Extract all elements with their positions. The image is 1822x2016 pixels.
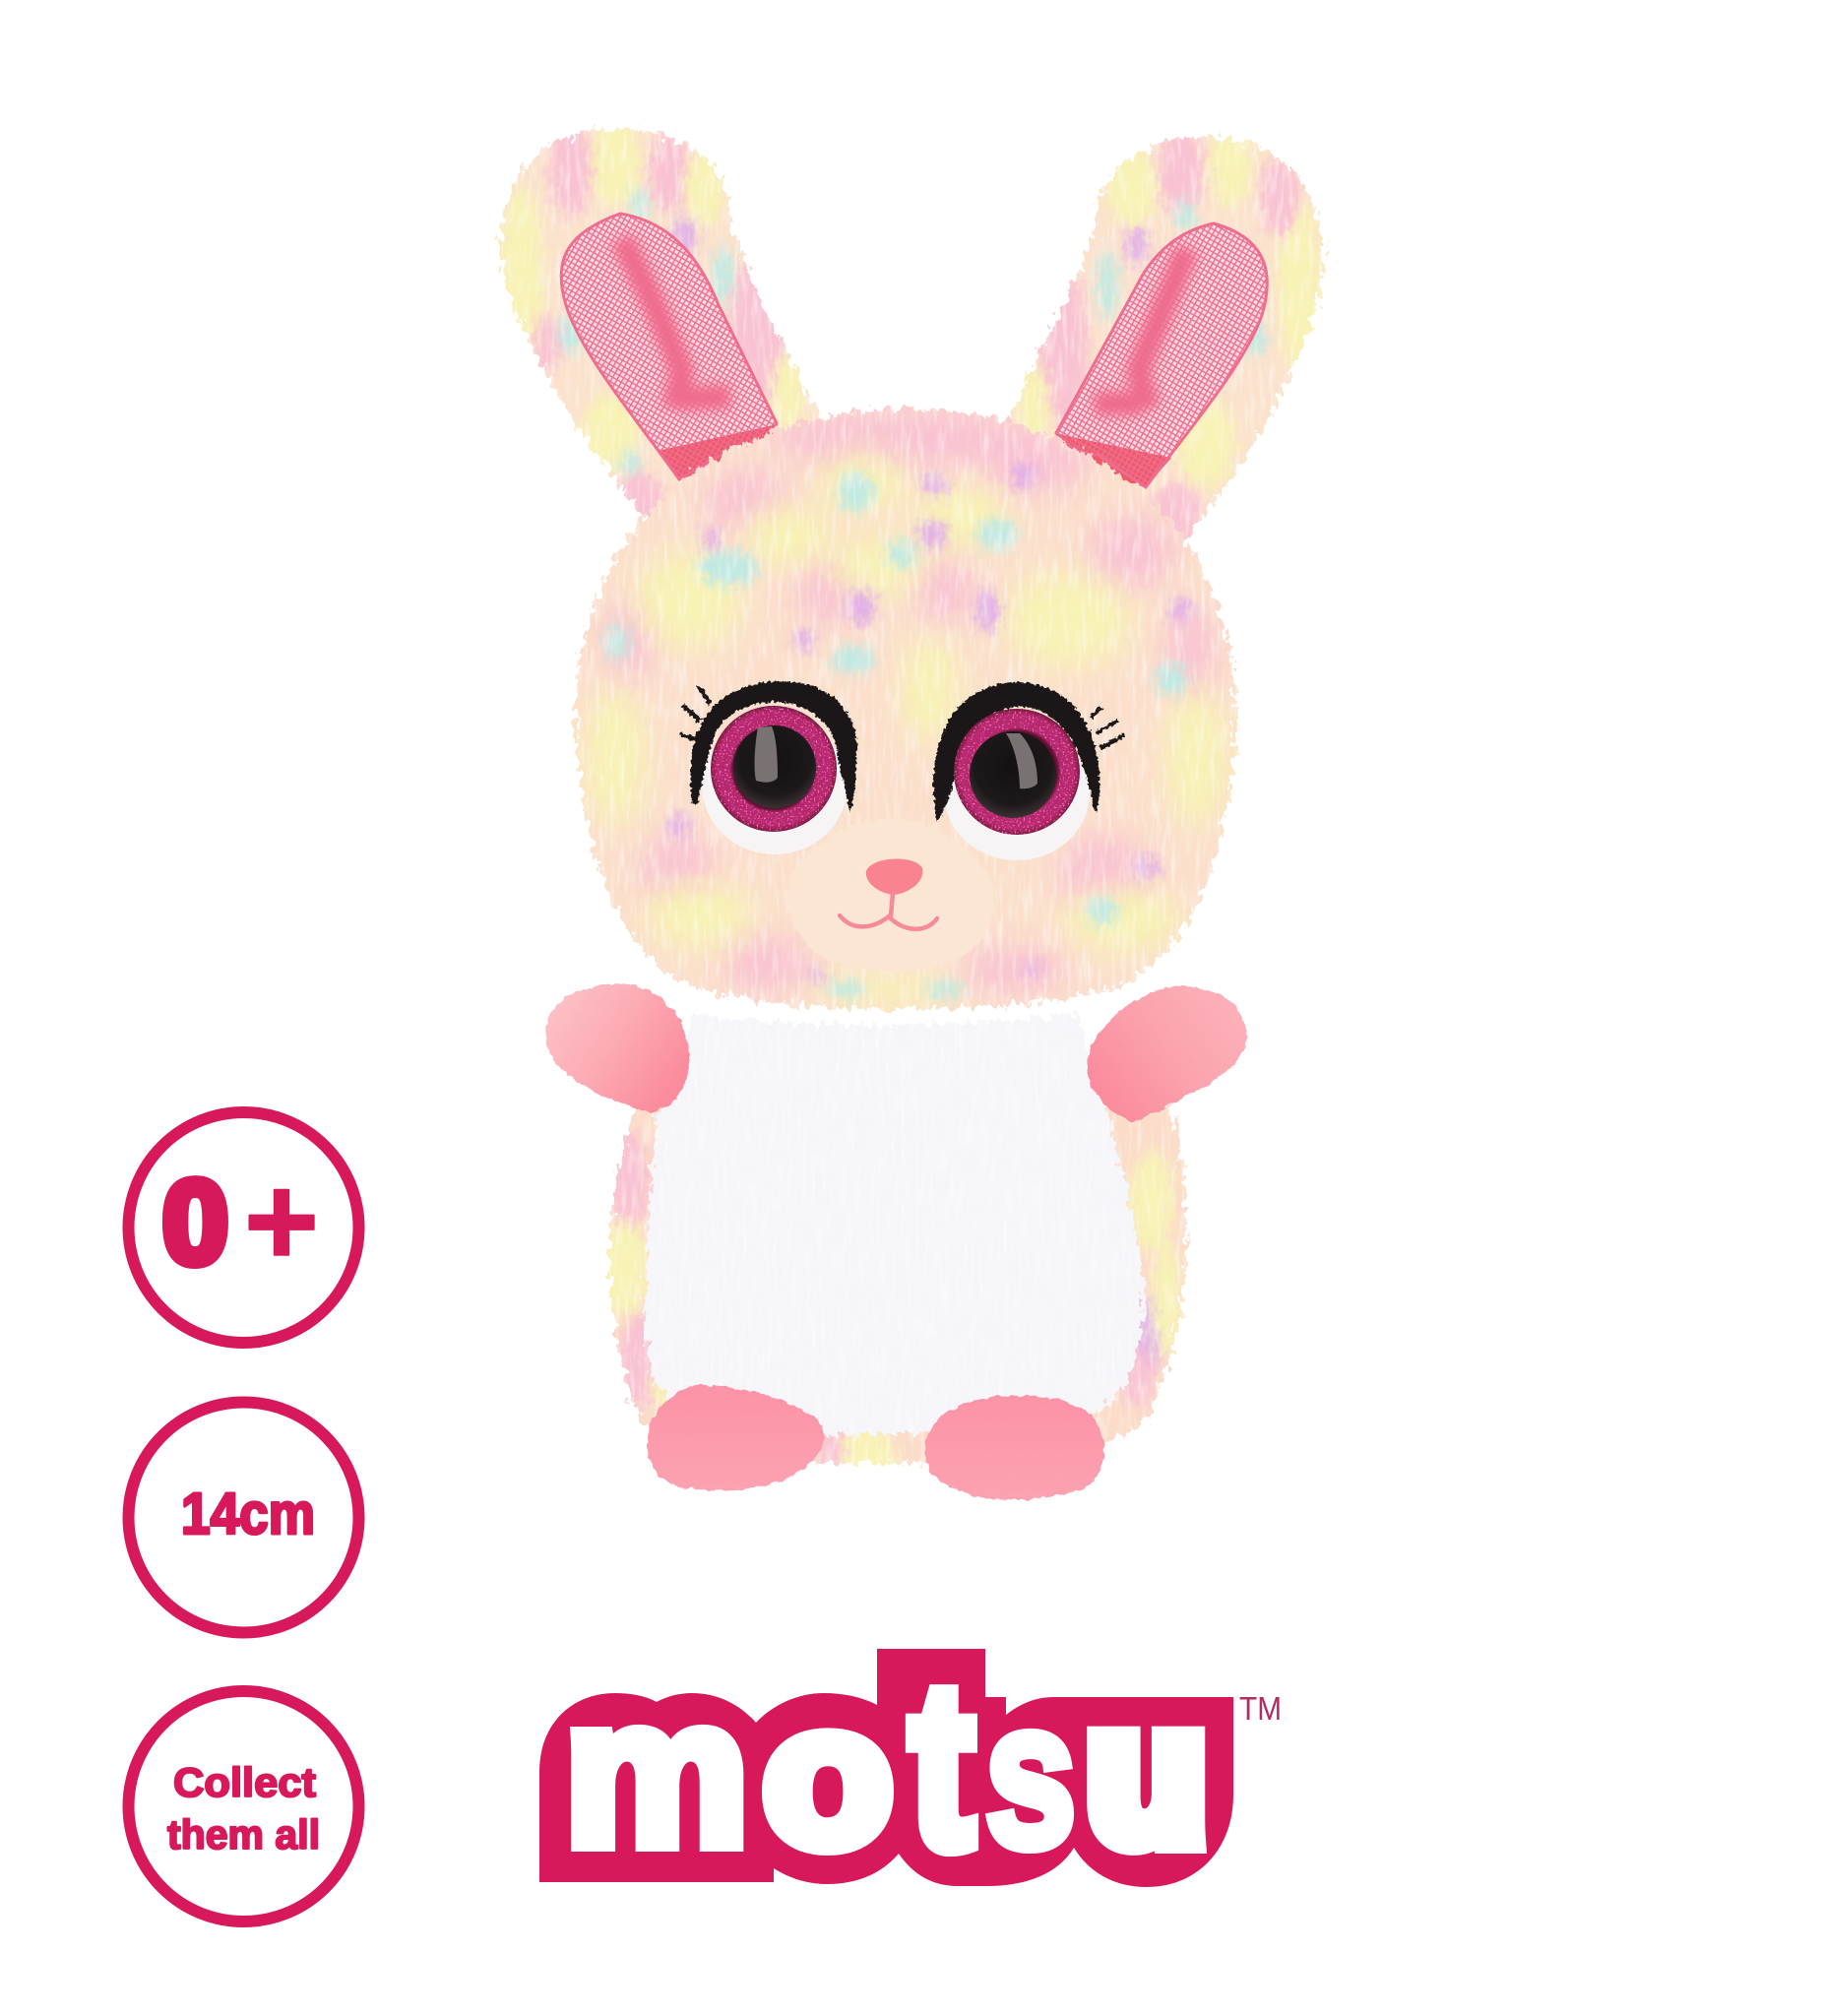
rainbow body xyxy=(605,1102,1191,1470)
size label: 14cm xyxy=(181,1481,315,1546)
left pupil xyxy=(733,725,816,808)
right ear xyxy=(1009,131,1329,540)
left ear inner mesh xyxy=(561,214,777,479)
right foot xyxy=(924,1396,1104,1500)
badge: size 14cm xyxy=(128,1402,358,1632)
plus sign: + xyxy=(244,1149,319,1292)
right iris xyxy=(954,709,1080,835)
white belly xyxy=(644,1011,1143,1436)
left eye xyxy=(679,681,857,854)
left arm xyxy=(545,983,689,1112)
muzzle xyxy=(788,819,994,972)
logo wordmark xyxy=(565,1634,1205,1895)
left eyelash xyxy=(679,681,857,813)
motsu logo xyxy=(539,1634,1282,1895)
trademark: TM xyxy=(1239,1690,1282,1727)
mouth xyxy=(840,893,937,929)
collect label: Collect xyxy=(173,1761,316,1806)
logo wordmark: t xyxy=(911,1634,974,1895)
badge: age 0+ xyxy=(128,1112,358,1343)
badge: collect them all xyxy=(128,1691,358,1922)
logo wordmark: o xyxy=(764,1666,892,1886)
them all label: them all xyxy=(167,1813,320,1858)
left foot xyxy=(648,1385,823,1490)
head xyxy=(561,394,1250,1034)
right eye xyxy=(933,682,1125,860)
right pupil xyxy=(970,731,1056,818)
logo wordmark: s xyxy=(985,1660,1076,1890)
left ear xyxy=(494,123,825,518)
logo backing shape xyxy=(539,1649,1233,1887)
right eyelash xyxy=(933,682,1125,822)
logo wordmark: m xyxy=(565,1657,748,1888)
plush bunny toy xyxy=(482,108,1339,1500)
age zero: 0 xyxy=(162,1157,228,1289)
right ear inner mesh xyxy=(1056,223,1267,487)
logo wordmark: u xyxy=(1089,1669,1205,1880)
face xyxy=(679,681,1125,972)
right arm xyxy=(1087,986,1246,1122)
left iris xyxy=(711,706,837,832)
nose xyxy=(866,859,922,895)
